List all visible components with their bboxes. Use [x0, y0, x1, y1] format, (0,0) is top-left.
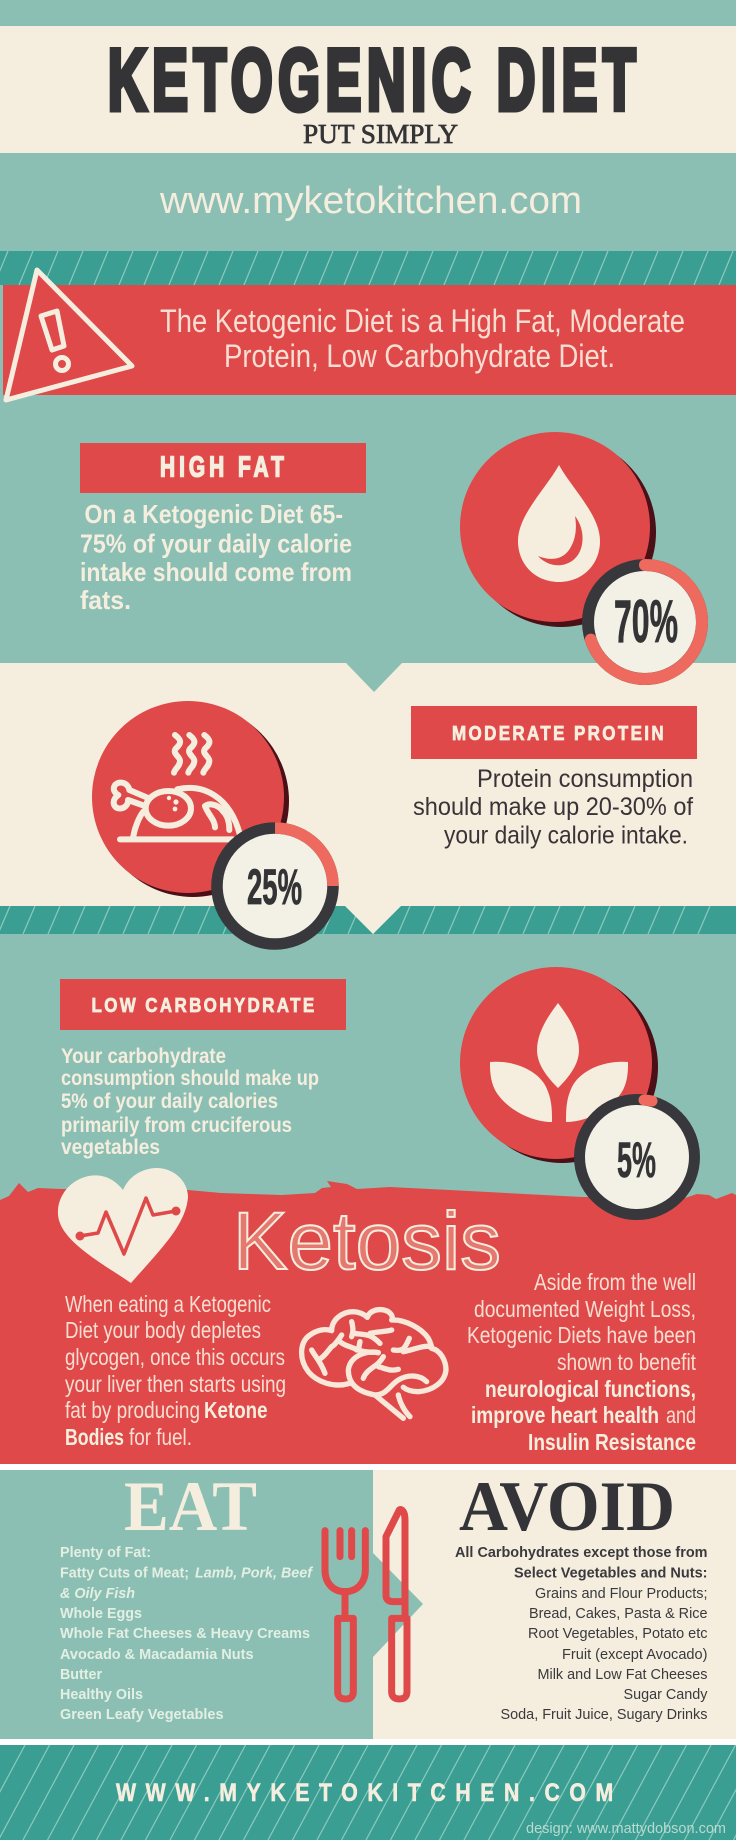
- panel: ketosis background: [0, 1181, 736, 1464]
- chart: 5 percent ring: 5%: [617, 1132, 656, 1188]
- divider gap bottom: [0, 1739, 736, 1745]
- heading: low carbohydrate: LOW CARBOHYDRATE: [92, 994, 314, 1016]
- chart: 25 percent ring: [217, 828, 333, 944]
- heading: low carbohydrate: [60, 979, 346, 1030]
- intro text: Protein, Low Carbohydrate Diet.: [224, 338, 615, 374]
- panel: low carbohydrate: [60, 967, 694, 1214]
- high fat text: [80, 499, 352, 615]
- heading: ketosis: Ketosis: [233, 1196, 501, 1287]
- icon: chicken circle: [92, 701, 289, 897]
- high fat text: intake should come from: [80, 557, 352, 587]
- ketosis right text: Aside from the well: [534, 1269, 696, 1295]
- eat list: & Oily Fish: [60, 1586, 135, 1602]
- panel: moderate protein: [92, 701, 697, 944]
- avoid list: Sugar Candy: [624, 1687, 708, 1703]
- low carbohydrate text: 5% of your daily calories: [61, 1090, 278, 1113]
- avoid list: Milk and Low Fat Cheeses: [538, 1667, 708, 1683]
- ketosis right text: Insulin Resistance: [528, 1429, 696, 1455]
- panel: eat: [0, 1468, 423, 1739]
- high fat text: 75% of your daily calorie: [80, 528, 352, 558]
- divider gap: [0, 1464, 736, 1470]
- ketosis left text: your liver then starts using: [65, 1371, 286, 1397]
- eat list: [60, 1545, 314, 1723]
- panel: intro banner: [3, 270, 736, 400]
- header band: [0, 26, 736, 153]
- icon: heart with pulse: [58, 1168, 188, 1283]
- heading: high fat: HIGH FAT: [160, 451, 284, 483]
- avoid list: Root Vegetables, Potato etc: [528, 1626, 708, 1642]
- low carbohydrate text: primarily from cruciferous: [61, 1114, 292, 1137]
- eat list: Healthy Oils: [60, 1687, 143, 1703]
- eat list: Avocado & Macadamia Nuts: [60, 1647, 254, 1663]
- moderate protein text: should make up 20-30% of: [413, 793, 693, 821]
- low carbohydrate text: vegetables: [61, 1136, 160, 1159]
- title: KETOGENIC DIET: [108, 33, 636, 129]
- chart: 25 percent ring: 25%: [247, 859, 302, 915]
- ketosis right text: [467, 1269, 696, 1455]
- eat list: Green Leafy Vegetables: [60, 1707, 224, 1723]
- icon: knife: [386, 1510, 407, 1699]
- heading: eat: EAT: [124, 1468, 257, 1546]
- design credit: design: www.mattydobson.com: [526, 1820, 726, 1837]
- avoid list: [455, 1545, 708, 1723]
- ketosis left text: glycogen, once this occurs: [65, 1344, 285, 1370]
- high fat text: On a Ketogenic Diet 65-: [84, 499, 343, 529]
- moderate protein text: your daily calorie intake.: [444, 822, 688, 850]
- low carbohydrate text: consumption should make up: [61, 1067, 319, 1090]
- high fat text: fats.: [80, 585, 131, 615]
- ketosis right text: shown to benefit: [557, 1349, 696, 1375]
- ketosis right text: neurological functions,: [485, 1376, 696, 1402]
- eat list: Plenty of Fat:: [60, 1545, 151, 1561]
- panel: avoid: [373, 1468, 736, 1739]
- ketosis left text: When eating a Ketogenic: [65, 1291, 271, 1317]
- footer url: WWW.MYKETOKITCHEN.COM: [116, 1778, 613, 1806]
- heading: avoid: AVOID: [459, 1468, 675, 1546]
- chart: 70 percent ring: [588, 565, 702, 679]
- ketosis left text: Bodies: [65, 1424, 124, 1450]
- heading: moderate protein: [411, 706, 697, 759]
- panel: ketosis: [58, 1168, 696, 1455]
- avoid list: Fruit (except Avocado): [562, 1647, 708, 1663]
- icon: fork: [325, 1531, 365, 1699]
- low carbohydrate text: [61, 1045, 319, 1159]
- avoid list: Grains and Flour Products;: [535, 1586, 708, 1602]
- intro text: [160, 303, 685, 374]
- icon: fat drop circle: [460, 432, 656, 627]
- avoid list: All Carbohydrates except those from: [455, 1545, 708, 1561]
- icon: warning triangle: [6, 270, 132, 400]
- ketosis right text: documented Weight Loss,: [474, 1296, 696, 1322]
- eat list: Whole Eggs: [60, 1606, 142, 1622]
- eat list: Butter: [60, 1667, 102, 1683]
- chart: 5 percent ring: [580, 1100, 694, 1214]
- panel: moderate protein background: [0, 663, 736, 906]
- eat list: Fatty Cuts of Meat;: [60, 1566, 189, 1582]
- ketosis left text: Diet your body depletes: [65, 1317, 261, 1343]
- eat list: Whole Fat Cheeses & Heavy Creams: [60, 1626, 310, 1642]
- chart: 70 percent ring: 70%: [614, 588, 678, 655]
- moderate protein text: [413, 765, 693, 850]
- striped band top: [0, 251, 736, 285]
- ketosis left text: fat by producing: [65, 1397, 200, 1423]
- avoid list: Soda, Fruit Juice, Sugary Drinks: [500, 1707, 708, 1723]
- heading: moderate protein: MODERATE PROTEIN: [452, 722, 664, 744]
- ketosis left text: [65, 1291, 286, 1450]
- panel: high fat: [80, 432, 702, 679]
- heading: high fat: [80, 443, 366, 493]
- avoid list: Select Vegetables and Nuts:: [514, 1566, 708, 1582]
- website url: www.myketokitchen.com: [159, 180, 582, 222]
- avoid list: Bread, Cakes, Pasta & Rice: [529, 1606, 708, 1622]
- icon: fork and knife: [325, 1510, 407, 1699]
- ketosis right text: Ketogenic Diets have been: [467, 1322, 696, 1348]
- subtitle: PUT SIMPLY: [303, 119, 458, 149]
- low carbohydrate text: Your carbohydrate: [61, 1045, 226, 1068]
- panel: footer: [0, 1745, 736, 1840]
- striped band middle: [0, 905, 736, 934]
- icon: plant circle: [460, 967, 658, 1163]
- moderate protein text: Protein consumption: [477, 765, 693, 793]
- ketosis left text: Ketone: [204, 1397, 268, 1423]
- eat list: Lamb, Pork, Beef: [195, 1566, 314, 1582]
- ketosis right text: improve heart health: [471, 1402, 659, 1428]
- icon: brain: [302, 1310, 446, 1418]
- ketosis right text: and: [666, 1402, 696, 1428]
- ketosis left text: for fuel.: [129, 1424, 192, 1450]
